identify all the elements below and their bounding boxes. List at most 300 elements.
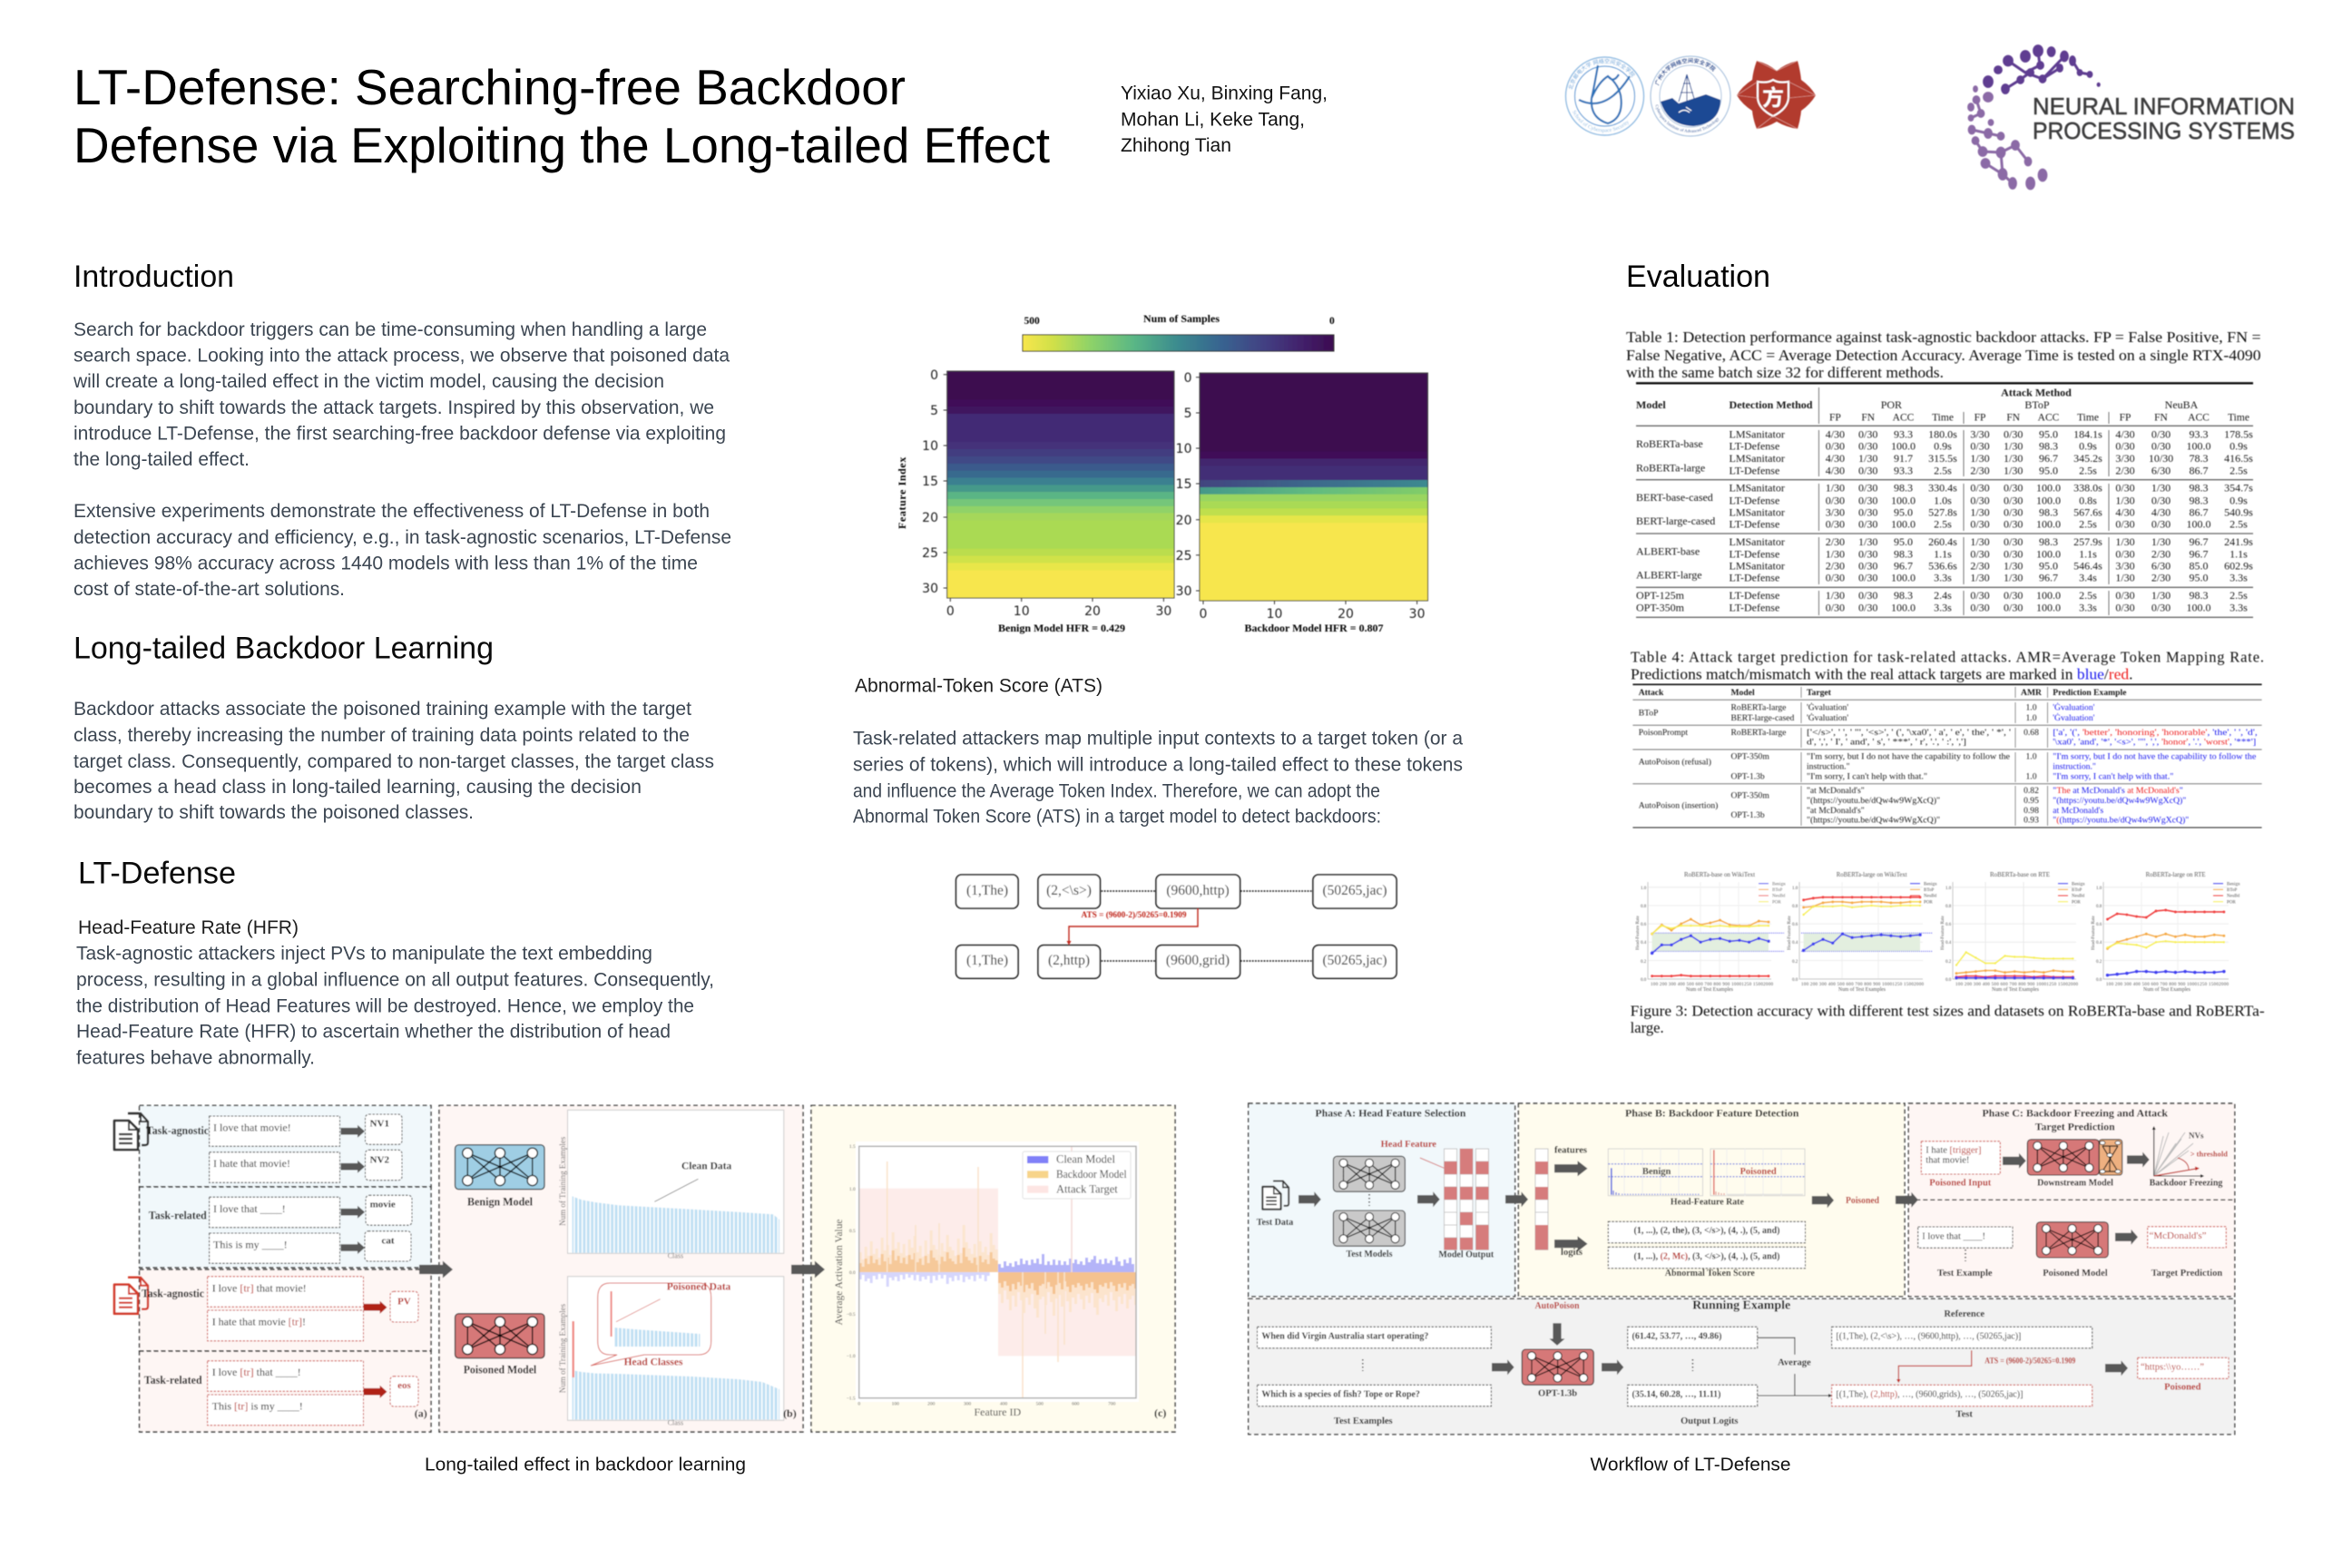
table values: 1/30 [1970, 535, 1990, 548]
panel c: average activation chart [811, 1105, 1175, 1432]
text block: introduction [73, 319, 731, 600]
title: LT-Defense: Searching-free Backdoor [74, 59, 906, 115]
table values: 0/30 [1970, 482, 1990, 495]
chart: roberta-large on rte: 0.2 [2096, 960, 2102, 965]
chart: roberta-base on wikitext: RoBERTa-base on WikiText [1684, 871, 1755, 878]
poisoned result: “https:\\yo……” [2141, 1362, 2204, 1372]
axis labels: 0.5 [849, 1229, 856, 1234]
table sub header: NeuBA [2165, 398, 2199, 411]
table values: 3.3s [2079, 601, 2097, 613]
heatmap: backdoor model: 30 [1176, 584, 1192, 599]
table values: 0/30 [2151, 428, 2171, 441]
panel: running example: AutoPoison [1535, 1301, 1580, 1311]
table detection methods: LT-Defense [1730, 517, 1779, 530]
chart: roberta-base on wikitext: Num of Test Examples [1686, 986, 1734, 993]
heatmap: benign model: 20 [1084, 604, 1101, 619]
colorbar legend: 0 [1329, 316, 1335, 327]
text block: long-tailed backdoor learning: target class. Consequently, compared to non-target classes, the target class [74, 751, 714, 772]
icon: clean documents [114, 1113, 148, 1150]
title: Defense via Exploiting the Long-tailed Effect [74, 117, 1050, 173]
text block: long-tailed backdoor learning: becomes a head class in long-tailed learning, causing the decision [74, 777, 642, 798]
text block: introduction: introduce LT-Defense, the first searching-free backdoor defense via exploiting [74, 423, 726, 445]
table values: 180.0s [1928, 428, 1957, 441]
table 4 amr column: 1.0 [2025, 772, 2037, 782]
table values: 2/30 [2151, 572, 2171, 584]
table values: 416.5s [2224, 452, 2253, 465]
table values: 4/30 [2151, 505, 2171, 518]
table 4 attack and model columns: OPT-1.3b [1731, 772, 1765, 782]
logo: cyberspace institute of advanced technology: 广州大学网络空间安全学院 [1655, 57, 1717, 86]
heatmap: benign model: Benign Model HFR = 0.429 [998, 622, 1125, 634]
table sub header: FN [1861, 412, 1876, 423]
table 4 prediction column: "((https://youtu.be/dQw4w9WgXcQ)" [2053, 816, 2189, 826]
table 4 target column: "(https://youtu.be/dQw4w9WgXcQ)" [1807, 796, 1940, 806]
table sub header: FP [1829, 412, 1841, 423]
clean inputs and outputs [210, 1114, 412, 1263]
table model names [1636, 437, 1715, 613]
text block: abnormal-token score: Task-related attackers map multiple input contexts to a target token (or a [853, 728, 1463, 750]
chart: poisoned data distribution: Head Classes [624, 1357, 683, 1368]
table 4 amr column: 0.93 [2024, 816, 2039, 826]
reference and test tokens: [(1,The), (2,<\s>), …, (9600,http), …, (50265,jac)] [1836, 1331, 2021, 1342]
table values: 3.3s [2230, 572, 2248, 584]
chart: roberta-large on wikitext: 100 200 300 400 500 600 700 800 900 10001250 15002000 [1801, 983, 1924, 987]
table values: 100.0 [2036, 517, 2061, 530]
authors: Zhihong Tian [1121, 135, 1231, 156]
table 4 amr column: 0.98 [2024, 806, 2039, 816]
figure caption: workflow: Workflow of LT-Defense [1590, 1455, 1791, 1475]
panel: running example [1249, 1298, 2235, 1435]
authors [1121, 83, 1328, 156]
poisoned inputs and outputs: This [tr] is my ____! [212, 1399, 303, 1412]
arrow: phase b to c [1896, 1192, 1918, 1208]
table values: 0/30 [2004, 547, 2023, 560]
table values: 4/30 [1826, 452, 1845, 465]
table values: 0/30 [1858, 505, 1877, 518]
table values: 1/30 [2115, 494, 2135, 506]
test examples: Test Examples [1334, 1416, 1393, 1426]
table values: 93.3 [1894, 464, 1913, 476]
table 4 attack and model columns: AutoPoison (refusal) [1639, 757, 1711, 767]
chart: roberta-base on rte: 0.6 [1945, 923, 1952, 927]
table values: 2/30 [2115, 464, 2135, 476]
table values: 0.8s [2079, 494, 2097, 506]
table detection methods: LMSanitator [1730, 428, 1785, 441]
table 4 target column: "(https://youtu.be/dQw4w9WgXcQ)" [1807, 816, 1940, 826]
table 1: detection performance [1636, 383, 2253, 617]
table model names: OPT-125m [1636, 589, 1685, 602]
table header: Attack Method [2001, 387, 2072, 399]
colorbar legend [1023, 314, 1335, 351]
table values: 0/30 [1858, 601, 1877, 613]
axis label: feature index: Feature Index [896, 456, 908, 529]
poisoned inputs and outputs: PV [397, 1296, 411, 1307]
table values [1826, 428, 2253, 613]
table values: 100.0 [1891, 440, 1916, 453]
table 4 target column: 'Ġvaluation' [1807, 702, 1848, 713]
colorbar legend: 500 [1024, 316, 1040, 327]
legend: Attack Target [1056, 1182, 1118, 1195]
chart: clean data distribution: Class [668, 1252, 683, 1259]
reference and test tokens: Reference [1944, 1309, 1984, 1319]
table values: 0/30 [1858, 547, 1877, 560]
table values: 98.3 [2039, 505, 2058, 518]
table values: 10/30 [2149, 452, 2173, 465]
text block: introduction: cost of state-of-the-art solutions. [74, 579, 345, 600]
table values: 91.7 [1894, 452, 1913, 465]
table model names: RoBERTa-base [1636, 437, 1703, 450]
table values: 98.3 [1894, 547, 1913, 560]
table values: 98.3 [1894, 482, 1913, 495]
table sub header [1829, 398, 2249, 423]
reference and test tokens: Test [1956, 1410, 1973, 1420]
chart: roberta-large on rte: 0.8 [2096, 905, 2102, 909]
chart: roberta-base on rte: NeuBd [2072, 895, 2085, 899]
table model names: BERT-base-cased [1636, 491, 1713, 504]
table values: 1/30 [1826, 547, 1845, 560]
axis labels: 1.0 [849, 1187, 856, 1192]
heading: lt-defense: LT-Defense [78, 857, 236, 891]
table values: 0/30 [1858, 517, 1877, 530]
heatmap: benign model: 25 [922, 546, 938, 561]
table 4 prediction column: "The at McDonald's at McDonald's" [2053, 786, 2183, 796]
task labels: Task-agnostic [146, 1124, 209, 1137]
panel: phase c backdoor freezing and attack target prediction [1908, 1103, 2235, 1297]
chart: roberta-base on rte: 1.0 [1945, 887, 1952, 891]
heatmap: backdoor model: 15 [1176, 477, 1192, 492]
task labels [142, 1124, 209, 1387]
chart: roberta-base on wikitext: BToP [1772, 888, 1783, 893]
table sub header: Time [1932, 412, 1954, 423]
chart: roberta-base on rte [1941, 871, 2085, 993]
table values: 3/30 [1826, 505, 1845, 518]
table values: 0/30 [1858, 572, 1877, 584]
title [74, 59, 1050, 173]
chart: poisoned data distribution: Num of Training Examples [558, 1303, 567, 1393]
table values: 0/30 [2151, 601, 2171, 613]
table model names: OPT-350m [1636, 601, 1685, 613]
panel c: average activation chart: 200 [927, 1401, 936, 1406]
chart: roberta-large on rte: 0.0 [2096, 978, 2102, 983]
table detection methods: LMSanitator [1730, 559, 1785, 572]
test tokens: (9600,grid) [1166, 953, 1230, 968]
table values: 0/30 [1826, 572, 1845, 584]
text block: long-tailed backdoor learning: boundary to shift towards the poisoned classes. [74, 802, 474, 823]
test tokens [956, 946, 1396, 978]
panel: phase b backdoor feature detection: features [1554, 1146, 1587, 1156]
text block: head-feature rate: features behave abnormally. [76, 1047, 315, 1069]
text block: head-feature rate: the distribution of Head Features will be destroyed. Hence, we employ the [76, 996, 694, 1016]
callout: head classes [591, 1283, 711, 1366]
table 4 amr column: 0.95 [2024, 796, 2039, 806]
table detection methods [1730, 428, 1785, 613]
table 4 attack and model columns: AutoPoison (insertion) [1639, 801, 1718, 811]
chart: roberta-large on wikitext: RoBERTa-large on WikiText [1837, 871, 1907, 878]
table 4 prediction column: instruction." [2053, 762, 2096, 772]
table values: 1/30 [1858, 535, 1877, 548]
table values: 2.4s [1934, 589, 1952, 602]
table values: 3/30 [1970, 428, 1990, 441]
reference and test tokens [1832, 1309, 2092, 1420]
table values: 2/30 [2151, 547, 2171, 560]
table values: 0/30 [2004, 494, 2023, 506]
table values: 100.0 [2187, 517, 2210, 530]
table values: 0/30 [1858, 589, 1877, 602]
table values: 98.3 [2039, 440, 2058, 453]
chart: roberta-base on rte: 0.2 [1945, 960, 1952, 965]
table values: 0/30 [1970, 601, 1990, 613]
table values: 2.5s [2230, 589, 2248, 602]
table sub header: ACC [2038, 412, 2060, 423]
table values: 0/30 [1970, 547, 1990, 560]
table values: 0/30 [2004, 505, 2023, 518]
chart: roberta-base on rte: RoBERTa-base on RTE [1990, 871, 2050, 878]
heatmap: benign model: 0 [930, 368, 938, 383]
test models: Test Models [1346, 1250, 1393, 1259]
target prediction: “McDonald's” [2149, 1230, 2207, 1241]
chart: roberta-base on wikitext: POR [1772, 900, 1781, 906]
panel c: average activation chart: 100 [892, 1401, 899, 1406]
chart: poisoned data distribution [558, 1277, 784, 1426]
chart: roberta-large on wikitext: 0.0 [1792, 978, 1798, 983]
table values: 0/30 [2004, 482, 2023, 495]
chart: roberta-large on wikitext: 0.2 [1792, 960, 1798, 965]
table values: 1/30 [1858, 452, 1877, 465]
table values: 2.5s [1934, 464, 1952, 476]
table values: 2.5s [2230, 464, 2248, 476]
heading: evaluation: Evaluation [1626, 260, 1770, 294]
chart: roberta-base on rte: Head-Feature Rate [1941, 915, 1945, 950]
benign model: Benign Model [467, 1195, 533, 1208]
heatmap: backdoor model: 20 [1338, 607, 1354, 622]
table values: 3.4s [2079, 572, 2097, 584]
panel: phase a head feature selection: Head Feature [1381, 1140, 1436, 1150]
table values: 0/30 [1826, 494, 1845, 506]
table values: 1/30 [2151, 482, 2171, 495]
table values: 4/30 [2115, 428, 2135, 441]
table values: 1/30 [2151, 535, 2171, 548]
logo: neural information processing systems [1968, 45, 2295, 189]
chart: roberta-base on rte: Num of Test Examples [1992, 986, 2040, 993]
test example: Test Example [1937, 1269, 1993, 1279]
chart: roberta-base on wikitext: 0.4 [1641, 941, 1647, 946]
table 4 attack and model columns: RoBERTa-large [1731, 728, 1786, 738]
logo wordmark: PROCESSING SYSTEMS [2033, 119, 2295, 144]
table values: 4/30 [1826, 464, 1845, 476]
reference tokens: (1,The) [966, 883, 1008, 898]
table values: 0/30 [1970, 494, 1990, 506]
table sub header: Time [2228, 412, 2249, 423]
table values: 2/30 [1826, 559, 1845, 572]
table values: 100.0 [2036, 482, 2061, 495]
opt-1.3b model [1522, 1349, 1593, 1399]
panel c: average activation chart: (c) [1154, 1406, 1166, 1419]
table values: 540.9s [2224, 505, 2253, 518]
table values: 98.3 [1894, 589, 1913, 602]
figure 3 caption [1631, 1002, 2265, 1036]
table values: 0/30 [1858, 428, 1877, 441]
table values: 100.0 [2036, 494, 2061, 506]
table 4 caption: Table 4: Attack target prediction for task-related attacks. AMR=Average Token Mapping Rate. [1631, 648, 2264, 665]
table values: 2/30 [1826, 535, 1845, 548]
text block: head-feature rate: process, resulting in a global influence on all output features. Consequently, [76, 969, 714, 991]
heatmap: benign model: 10 [922, 439, 938, 454]
table 4 attack and model columns: BERT-large-cased [1731, 713, 1794, 723]
chart: roberta-large on rte: Num of Test Examples [2143, 986, 2191, 993]
table sub header: Time [2077, 412, 2099, 423]
table 4 prediction column: 'Ġvaluation' [2053, 712, 2095, 723]
table values: 0/30 [2004, 601, 2023, 613]
table detection methods: LT-Defense [1730, 494, 1779, 506]
subheading: head-feature rate: Head-Feature Rate (HFR) [78, 917, 299, 938]
table 4 prediction column: '\xa0', 'and', '*', '<s>', '"', ',', 'honor' , '.', 'worst' , '***'] [2053, 738, 2256, 748]
chart: roberta-base on rte: 100 200 300 400 500 600 700 800 900 10001250 15002000 [1955, 983, 2078, 987]
table 4 prediction column: "I'm sorry, but I do not have the capability to follow the [2053, 752, 2256, 762]
table 4 prediction column: "(https://youtu.be/dQw4w9WgXcQ)" [2053, 796, 2186, 806]
table values: 3/30 [2115, 559, 2135, 572]
test tokens: (2,http) [1048, 953, 1090, 968]
colorbar legend: Num of Samples [1143, 314, 1220, 325]
table values: 0/30 [1858, 482, 1877, 495]
output logits: Output Logits [1681, 1416, 1738, 1426]
panel b: models and class distributions [439, 1105, 803, 1432]
diagram: abnormal token score mapping [956, 875, 1396, 978]
table values: 0/30 [2151, 494, 2171, 506]
table 4 target column: ['</s>', ' ', ' "', '<s>', ' (', '\xa0', ' a', ' e', ' the', ' *', ' [1807, 728, 2011, 738]
heatmap: benign model: 30 [1155, 604, 1171, 619]
chart: roberta-large on wikitext: BToP [1924, 888, 1935, 893]
table values: 0.9s [1934, 440, 1952, 453]
table values: 1/30 [1826, 589, 1845, 602]
chart: roberta-base on wikitext: Head-Feature Rate [1636, 915, 1641, 950]
axis labels: −0.5 [847, 1312, 856, 1318]
heatmap: benign model: 20 [922, 511, 938, 525]
table 4 amr column [2024, 703, 2039, 826]
reference tokens [956, 875, 1396, 908]
table values: 1/30 [2115, 535, 2135, 548]
table sub header: BToP [2024, 398, 2050, 411]
backdoor freezing chart: > threshold [2190, 1150, 2228, 1159]
chart: roberta-base on wikitext: 0.2 [1641, 960, 1647, 965]
table 4 amr column: 1.0 [2025, 752, 2037, 762]
table values: 567.6s [2073, 505, 2102, 518]
task labels: Task-agnostic [142, 1287, 204, 1299]
panel: phase b backdoor feature detection: Poisoned [1846, 1196, 1879, 1206]
chart: roberta-large on rte [2092, 871, 2240, 993]
table 1 caption: Table 1: Detection performance against task-agnostic backdoor attacks. FP = False Positive, FN = [1626, 328, 2261, 346]
table 4 target column: instruction." [1807, 762, 1850, 772]
panel: phase b backdoor feature detection [1518, 1103, 1905, 1297]
text block: introduction: detection accuracy and efficiency, e.g., in task-agnostic scenarios, LT-Defense [74, 527, 731, 548]
arrow: ats mapping in running example [1896, 1350, 2076, 1383]
poisoned inputs and outputs: I love [tr] that movie! [212, 1281, 307, 1294]
table values: 0/30 [2115, 547, 2135, 560]
text block: introduction: Extensive experiments demonstrate the effectiveness of LT-Defense in both [74, 501, 710, 522]
table sub header: ACC [2188, 412, 2210, 423]
logo: cyberspace institute of advanced technology [1650, 54, 1731, 138]
arrow: average: Average [1778, 1358, 1811, 1368]
chart: roberta-base on wikitext: 0.6 [1641, 923, 1647, 927]
clean inputs and outputs: NV2 [370, 1154, 389, 1165]
table values: 0/30 [1858, 440, 1877, 453]
selected feature column [1535, 1149, 1548, 1250]
table values: 95.0 [2189, 572, 2209, 584]
axis labels: 0.0 [849, 1270, 856, 1276]
panel: phase a head feature selection [1249, 1103, 1515, 1297]
chart: clean data distribution: Clean Data [681, 1161, 731, 1171]
table values: 0/30 [1826, 517, 1845, 530]
table sub header: ACC [1893, 412, 1915, 423]
arrow: phase a to b [1505, 1191, 1528, 1207]
table sub header: FN [2006, 412, 2021, 423]
table values: 95.0 [1894, 505, 1913, 518]
text block: long-tailed backdoor learning: class, thereby increasing the number of training data points related to the [74, 725, 690, 746]
icon: test data [1262, 1181, 1289, 1210]
logo wordmark [2033, 94, 2295, 144]
chart: roberta-large on wikitext: Benign [1924, 882, 1937, 887]
chart: clean data distribution [558, 1110, 784, 1259]
text block: introduction: boundary to shift towards the attack targets. Inspired by this observation, we [74, 397, 714, 418]
chart: roberta-large on wikitext [1788, 871, 1937, 993]
panel b: models and class distributions: (b) [783, 1407, 797, 1420]
abnormal token boxes: (1, ...), (2, Mc), (3, </s>), (4, .), (5, and) [1633, 1252, 1780, 1262]
table detection methods: LT-Defense [1730, 589, 1779, 602]
table 4 target column: "at McDonald's" [1807, 806, 1865, 816]
text block: introduction: the long-tailed effect. [74, 449, 250, 470]
table values: 2.5s [2079, 517, 2097, 530]
table model names: ALBERT-base [1636, 544, 1700, 557]
target prediction: Target Prediction [2151, 1269, 2222, 1279]
table values: 96.7 [2189, 535, 2209, 548]
panel a: task examples: (a) [415, 1407, 427, 1420]
table 4 prediction column [2053, 702, 2258, 826]
table values: 96.7 [2189, 547, 2209, 560]
chart: roberta-large on wikitext: 1.0 [1792, 887, 1798, 891]
table values: 260.4s [1928, 535, 1957, 548]
panel: phase b backdoor feature detection: Head-Feature Rate [1671, 1197, 1744, 1207]
logo wordmark: NEURAL INFORMATION [2033, 94, 2295, 120]
chart: roberta-large on rte: 1.0 [2096, 887, 2102, 891]
poisoned inputs and outputs: I hate that movie [tr]! [212, 1315, 306, 1328]
table 4 attack and model columns: BToP [1639, 708, 1658, 718]
table values: 184.1s [2073, 428, 2102, 441]
logo: red star shield [1737, 61, 1816, 129]
panel: phase c backdoor freezing and attack target prediction: Target Prediction [2035, 1121, 2115, 1133]
test example: I love that ____! [1922, 1231, 1985, 1241]
table 4 amr column: 0.68 [2024, 728, 2039, 738]
authors: Yixiao Xu, Binxing Fang, [1121, 83, 1328, 103]
figure: long-tailed effect in backdoor learning [114, 1105, 1175, 1432]
table 4 caption: Predictions match/mismatch with the real attack targets are marked in blue/red. [1631, 665, 2132, 682]
table 4 header: Prediction Example [2053, 688, 2127, 698]
poisoned model: Poisoned Model [2043, 1269, 2108, 1279]
table 4 amr column: 1.0 [2025, 713, 2037, 723]
table values: 98.3 [2189, 589, 2209, 602]
chart: roberta-large on wikitext: POR [1924, 900, 1933, 906]
table 4 prediction column: "I'm sorry, I can't help with that." [2053, 772, 2173, 782]
table detection methods: LT-Defense [1730, 547, 1779, 560]
table 1 caption: with the same batch size 32 for different methods. [1626, 364, 1944, 381]
table values: 1.1s [2079, 547, 2097, 560]
table 4: attack target prediction [1632, 684, 2262, 828]
table values: 1/30 [1826, 482, 1845, 495]
poisoned model [2036, 1222, 2108, 1279]
axis labels [847, 1144, 856, 1401]
axis labels: −1.0 [847, 1354, 856, 1359]
activation bars: backdoor model negative [998, 1272, 1136, 1318]
chart: roberta-base on rte: 0.0 [1945, 978, 1952, 983]
table sub header: FP [2120, 412, 2131, 423]
